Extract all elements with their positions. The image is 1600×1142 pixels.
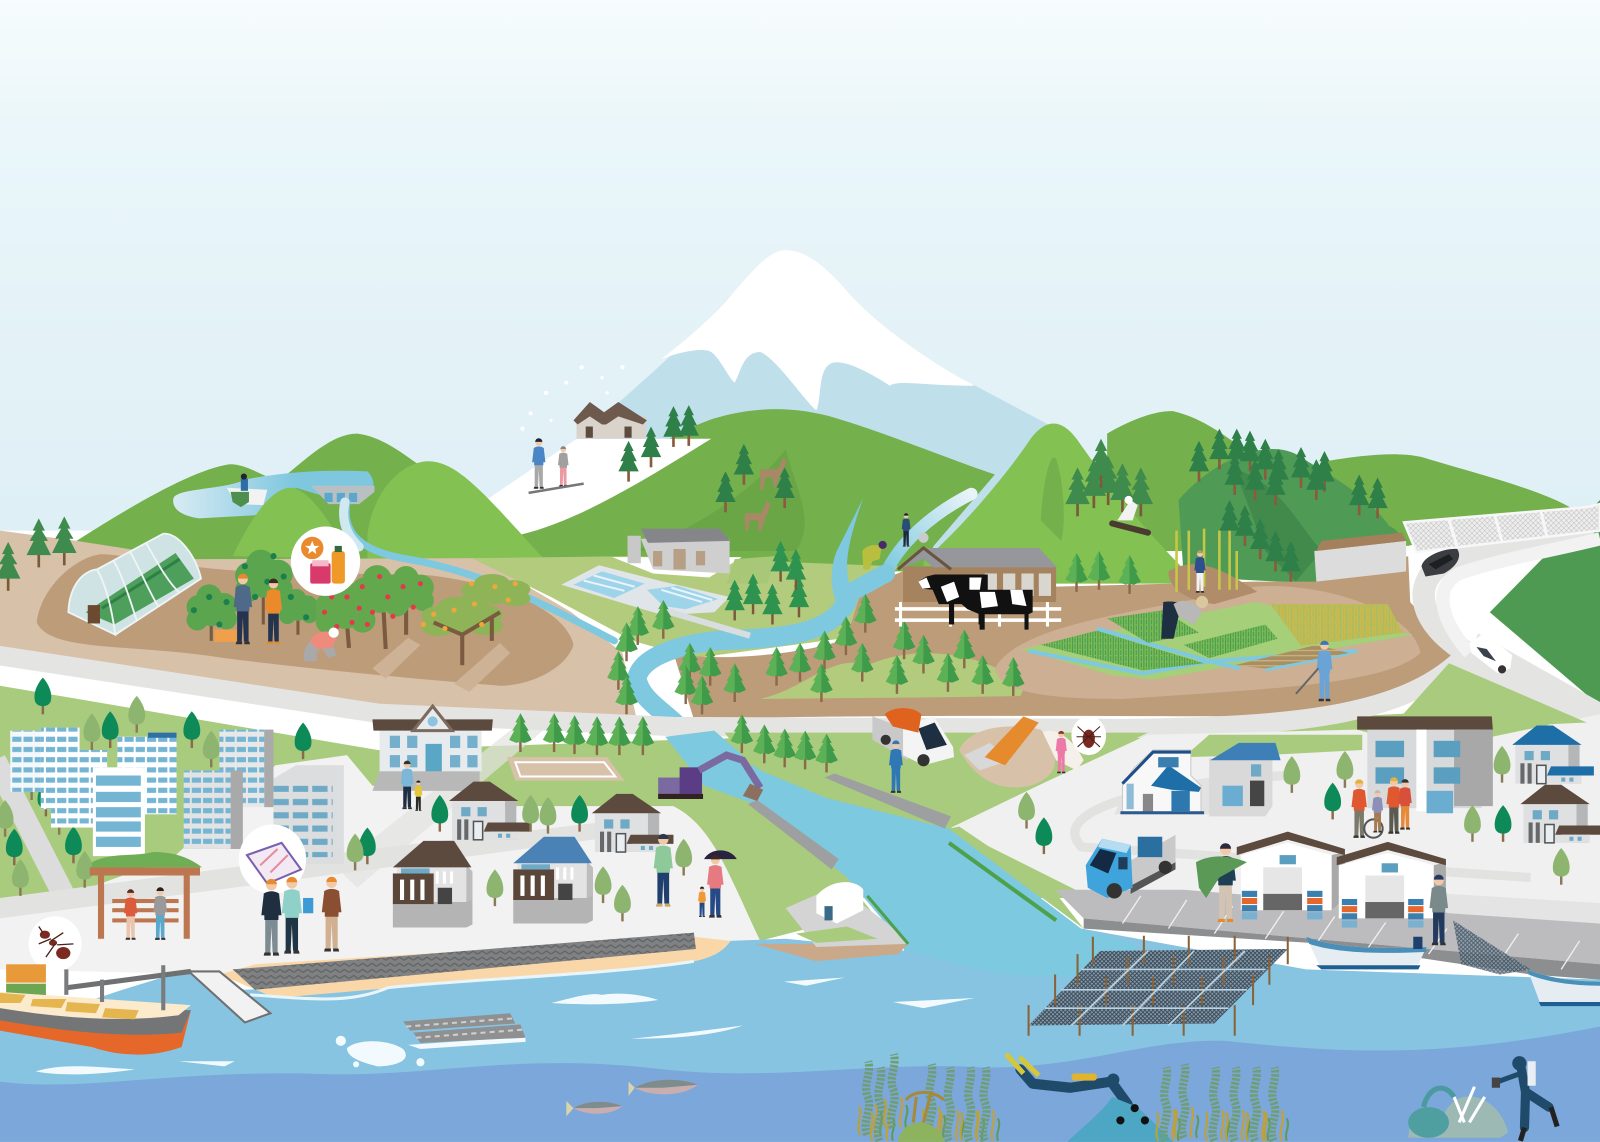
trees beside barn	[1065, 551, 1141, 594]
snow-capped mountain	[480, 250, 1056, 551]
school walkers	[401, 761, 422, 811]
bamboo plot	[1168, 529, 1257, 604]
stream from dam	[344, 502, 614, 641]
trees near river	[607, 541, 809, 714]
central green hill	[520, 409, 995, 571]
farmer navy overalls	[234, 574, 252, 644]
map bubble	[239, 824, 306, 894]
retaining wall and concrete	[1314, 522, 1406, 582]
black car	[1421, 549, 1459, 577]
seaweed bed left	[858, 1054, 999, 1142]
deep sea	[0, 1027, 1600, 1142]
snowflakes	[520, 365, 624, 431]
lower land base green	[0, 686, 1600, 898]
fish crates	[1242, 891, 1423, 928]
brown land right	[673, 556, 1454, 719]
seaweed aquaculture rack	[1029, 936, 1288, 1036]
rock with urchins	[1067, 1097, 1173, 1142]
pier	[1055, 888, 1600, 980]
water gate station	[755, 882, 908, 961]
ski slope	[482, 439, 711, 535]
containers	[6, 964, 46, 998]
moored boat two	[1528, 969, 1600, 1006]
dark forest hill	[1179, 449, 1398, 584]
skiers	[529, 438, 584, 493]
conifers left of orchard	[0, 516, 77, 591]
harbour jetty	[66, 971, 270, 1022]
warehouses	[1237, 832, 1446, 918]
net fisherman	[1429, 875, 1448, 945]
excavator	[658, 755, 763, 801]
salmon fish	[566, 1080, 698, 1116]
river right revetment	[824, 773, 951, 829]
upper land beige	[0, 531, 638, 724]
red apple orchard	[316, 565, 434, 649]
bright hill left	[233, 488, 352, 559]
high-rise apartments	[10, 728, 273, 856]
blue roof house	[1209, 743, 1281, 816]
ski lodge	[573, 402, 647, 439]
river lower	[665, 731, 1122, 980]
orange persimmon orchard	[421, 574, 530, 665]
diver photographer	[1492, 1056, 1557, 1141]
rice paddies	[1020, 602, 1413, 680]
river green bank right	[724, 733, 1148, 929]
cow barn	[898, 548, 1057, 602]
urban street grey	[0, 714, 653, 918]
fisherman with seaweed	[1196, 843, 1247, 922]
modern white house	[1114, 750, 1224, 814]
drinking man	[654, 834, 673, 907]
green patch among planted trees	[760, 653, 1026, 699]
bamboo farmer	[1194, 550, 1206, 593]
river bank dark edge	[949, 843, 1056, 920]
right side houses	[1512, 726, 1600, 843]
far right hill	[1316, 454, 1571, 546]
farmer orange jacket	[265, 579, 282, 644]
care-giving group	[1351, 777, 1412, 838]
suburban houses middle	[393, 782, 673, 928]
paddy surrounding soil	[995, 586, 1420, 699]
back hill right	[1107, 411, 1250, 551]
tick bubble	[1071, 716, 1106, 755]
dairy cows	[918, 574, 1033, 630]
bright hill centre-left	[367, 461, 546, 561]
white van	[1469, 633, 1512, 673]
orchard plot	[37, 554, 573, 686]
urban ground left	[0, 755, 760, 980]
three-storey apartment	[1357, 716, 1493, 813]
farmer crouching	[304, 628, 339, 661]
planted tree grid	[674, 594, 1024, 714]
seawall breakwater	[233, 933, 696, 990]
greenhouse	[68, 534, 201, 635]
light field behind treatment plant	[471, 556, 898, 658]
urban ground right	[949, 714, 1600, 929]
right urban trees	[1018, 746, 1570, 885]
seaweed bed right	[1156, 1064, 1288, 1141]
river mouth blend	[908, 929, 1153, 976]
diver swimming	[1006, 1054, 1128, 1104]
grey apartment	[273, 765, 344, 864]
river workers	[862, 513, 929, 569]
bending rice farmer	[1161, 596, 1208, 639]
white fence	[895, 602, 1061, 627]
coral reef	[1408, 1087, 1508, 1138]
trees on ski slope	[618, 405, 699, 482]
product bubble	[291, 527, 360, 596]
left diagonal road	[0, 760, 66, 900]
dense forest on dark hill	[1189, 429, 1388, 582]
forestry worker	[1112, 496, 1148, 533]
sky background	[0, 0, 1600, 531]
harvest box	[214, 630, 237, 642]
seated couple	[124, 887, 167, 940]
tree row by school	[509, 713, 838, 772]
bright right hill	[923, 423, 1199, 584]
ant bubble	[29, 916, 82, 971]
spray truck	[872, 708, 954, 766]
woman with umbrella and child	[698, 850, 737, 918]
pergola bench with green roof	[90, 852, 202, 939]
netted slope wall	[1404, 504, 1600, 552]
blue truck	[1086, 835, 1176, 898]
sea	[0, 929, 1600, 1142]
dam	[311, 486, 374, 504]
school building	[372, 706, 493, 791]
wave-dissipating blocks in sea	[403, 1013, 526, 1049]
deer and forest trees	[715, 444, 795, 531]
curved street right	[1075, 776, 1531, 878]
moored boat one	[1306, 937, 1427, 969]
fishing net	[1453, 920, 1531, 974]
green lawn right upper	[1184, 663, 1587, 757]
survey team	[261, 877, 341, 956]
road network	[0, 526, 1600, 735]
woman with dog	[1043, 731, 1084, 773]
cargo ship	[0, 965, 191, 1055]
main river upper	[637, 494, 971, 727]
sand beach	[219, 937, 731, 998]
shore foam	[250, 961, 694, 999]
sports field	[507, 757, 624, 781]
boat on reservoir	[227, 473, 267, 507]
green bank behind left urban	[653, 745, 893, 941]
pest sprayer	[889, 740, 903, 793]
playground	[959, 716, 1055, 787]
orchard soil light patches	[372, 638, 510, 692]
conifer forest hillside	[1065, 439, 1153, 516]
right dark mountain	[1490, 500, 1600, 706]
water wave highlights	[36, 978, 974, 1074]
road inner lane right	[1443, 539, 1600, 653]
far green hills left	[77, 434, 541, 561]
green fruit orchard	[187, 550, 318, 641]
water treatment plant	[561, 529, 776, 636]
strimmer worker	[1296, 641, 1332, 701]
diagonal avenue trees	[0, 678, 311, 896]
reservoir lake	[173, 471, 373, 518]
river left concrete revetment	[748, 800, 839, 869]
suburban trees	[347, 795, 692, 921]
